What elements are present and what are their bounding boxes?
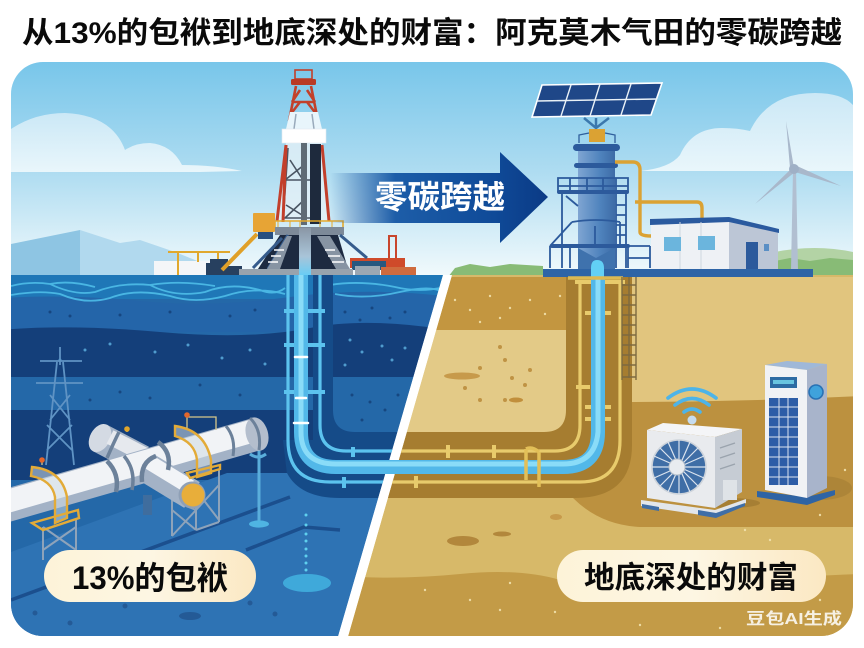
server cabinet (757, 361, 852, 505)
tower body (578, 151, 615, 258)
main run (5, 415, 272, 506)
heat pump unit (641, 423, 760, 518)
arrow: zero carbon leap (330, 152, 548, 243)
main pipe (301, 262, 598, 467)
distant hills left (11, 230, 200, 275)
gold cap (589, 129, 605, 142)
floor (11, 473, 378, 636)
left underground layers (0, 275, 460, 640)
dark band right (573, 396, 860, 527)
derrick upper (289, 70, 318, 121)
divider (337, 275, 452, 640)
waves (11, 283, 445, 301)
branch back (84, 420, 145, 460)
derrick lower (277, 143, 329, 222)
trench right (388, 277, 632, 498)
center support (143, 495, 152, 515)
energy station (532, 83, 841, 380)
station base (543, 269, 813, 277)
pipe rings (107, 418, 260, 492)
glow highlights (294, 357, 308, 423)
left boats and tanks (154, 234, 257, 275)
trench left (283, 275, 398, 500)
clamps on pipe (526, 448, 539, 487)
platforms and ladder (550, 178, 650, 268)
yellow ladder (622, 277, 636, 380)
speckles (425, 296, 845, 628)
arrow label: 零碳跨越 (375, 179, 505, 215)
well head glow (591, 260, 604, 277)
speckles (60, 340, 405, 365)
right underground layers (348, 275, 853, 636)
dark layer (0, 323, 460, 377)
right containers (350, 236, 416, 275)
yellow cages (31, 426, 220, 530)
label pill: 13% burden: 13%的包袱 (72, 560, 228, 596)
ground structure (568, 276, 623, 280)
blue side lines (284, 275, 400, 488)
title: 从13%的包袱到地底深处的财富：阿克莫木气田的零碳跨越 (22, 17, 842, 50)
label pill: deep wealth (557, 550, 826, 602)
stand and pool (249, 450, 331, 592)
pool and droplets (283, 574, 331, 592)
wind turbine (755, 121, 841, 270)
yellow pipes (615, 162, 702, 236)
label pill: deep wealth: 地底深处的财富 (584, 561, 798, 595)
rig deck (275, 221, 343, 228)
drilling rig (154, 70, 416, 275)
building (650, 217, 779, 269)
left cloud (11, 113, 242, 172)
rig base (258, 235, 348, 269)
indicators (42, 417, 216, 465)
lower layer (340, 572, 860, 640)
U-shaped well pipes (284, 262, 625, 488)
yellow side lines (392, 280, 625, 488)
right cloud (640, 93, 853, 171)
grey scaffolds (43, 470, 219, 560)
water band (0, 275, 460, 299)
label pill: 13% burden (44, 550, 256, 602)
pipeline assembly (5, 412, 272, 560)
sky background (11, 62, 853, 277)
distant hills right (778, 248, 853, 261)
wifi icon (668, 389, 716, 424)
floor seam (11, 497, 340, 600)
branch front (146, 462, 206, 508)
green ground strip (448, 258, 853, 277)
watermark: 豆包AI生成 (746, 609, 842, 628)
power pylon (36, 347, 83, 465)
solar panel (532, 83, 662, 128)
